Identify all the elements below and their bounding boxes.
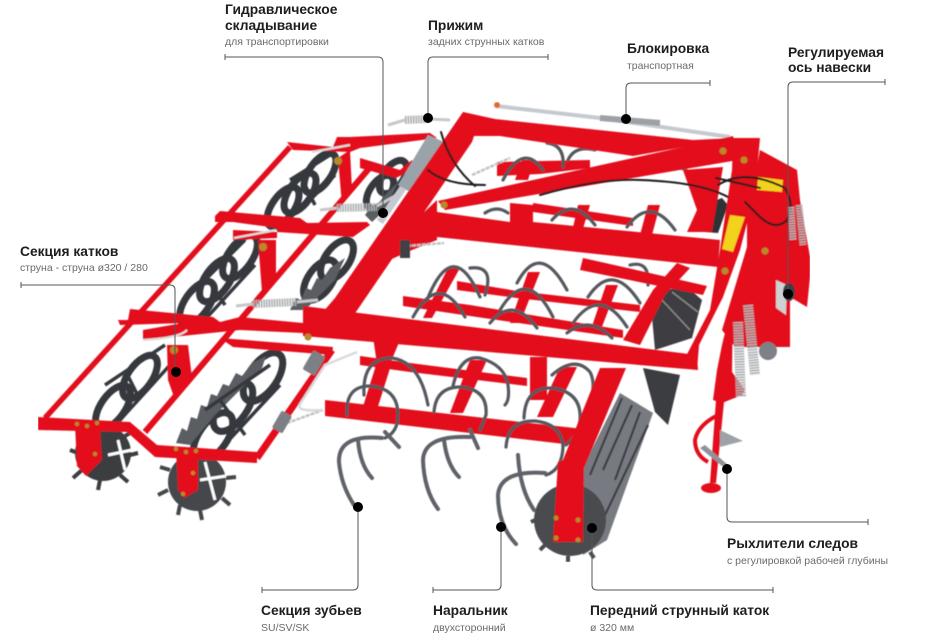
rear frame right rail	[257, 350, 332, 458]
front fork arm	[553, 368, 626, 542]
inner right arm	[683, 167, 723, 232]
connector to middle beam	[385, 200, 437, 262]
callout: hydraulic folding: для транспортировки	[225, 36, 329, 48]
diagonal brace	[438, 136, 738, 210]
callout: front string roller	[587, 523, 773, 634]
callout: track looseners: Рыхлители следов	[727, 536, 858, 551]
rear transverse beam	[463, 112, 735, 156]
main diagonal beam	[303, 112, 480, 335]
callout: tine section: SU/SV/SK	[261, 622, 309, 634]
tine shanks	[360, 160, 660, 417]
callout: front string roller: ø 320 мм	[590, 622, 634, 634]
bent handle and chain brackets	[272, 240, 410, 434]
callout: tine section: Секция зубьев	[261, 603, 362, 618]
main transverse beam	[303, 306, 698, 370]
track loosener	[695, 400, 743, 493]
rear frame tail bar	[38, 417, 257, 463]
right diagonal arm	[623, 263, 690, 345]
callout: hydraulic folding	[225, 2, 388, 218]
rear roller inner section	[158, 156, 412, 520]
lower brace of middle beam	[580, 258, 707, 295]
callout: share	[433, 522, 508, 634]
callout: rear roller pressure	[423, 18, 548, 123]
warning labels	[722, 177, 783, 252]
chains	[287, 158, 510, 423]
callout: transport lock	[621, 41, 710, 124]
pivot axle hub	[759, 280, 795, 360]
callout: adjustable hitch axle	[783, 45, 885, 299]
rear tensioning springs	[236, 119, 450, 306]
callout: roller section: струна - струна ø320 / 280	[20, 262, 148, 274]
callout: transport lock: транспортная	[627, 60, 694, 72]
callout: track looseners	[722, 464, 888, 567]
callout: front string roller: Передний струнный каток	[590, 603, 769, 618]
roller mount brackets	[75, 145, 352, 498]
bolts	[75, 148, 769, 542]
stabilizer mount	[713, 300, 745, 403]
hydraulic cylinder	[380, 135, 444, 222]
cultivator machine illustration	[38, 102, 810, 562]
rear roller outer section	[70, 148, 342, 490]
callout: track looseners: с регулировкой рабочей глубины	[727, 555, 888, 567]
callout: hydraulic folding: складывание	[225, 18, 318, 33]
callout: roller section	[20, 244, 181, 377]
callout: roller section: Секция катков	[20, 244, 118, 259]
callout: share: двухсторонний	[433, 622, 506, 634]
vertical column	[684, 138, 760, 370]
callout: rear roller pressure: задних струнных катков	[428, 36, 545, 48]
rear frame outer rail	[45, 147, 290, 418]
transport lock bar	[494, 102, 730, 137]
middle transverse beam	[437, 203, 720, 267]
callout: adjustable hitch axle: Регулируемая	[788, 45, 884, 60]
callout: transport lock: Блокировка	[627, 41, 710, 56]
callout: tine section	[261, 502, 363, 634]
front string roller	[531, 198, 728, 562]
spring tine coils: lower rows	[339, 358, 593, 544]
hydraulic hoses	[428, 132, 791, 225]
callout: adjustable hitch axle: ось навески	[788, 60, 871, 75]
headstock side plate	[722, 150, 810, 347]
callout: hydraulic folding: Гидравлическое	[225, 2, 337, 17]
spring tine coils: upper rows	[413, 143, 697, 338]
thin tine rails	[325, 160, 640, 447]
callout: rear roller pressure: Прижим	[428, 18, 483, 33]
callout: share: Наральник	[433, 603, 508, 618]
stabilizer springs	[738, 205, 803, 397]
rear frame middle rail	[145, 165, 372, 432]
rear frame cross arms	[118, 133, 437, 355]
